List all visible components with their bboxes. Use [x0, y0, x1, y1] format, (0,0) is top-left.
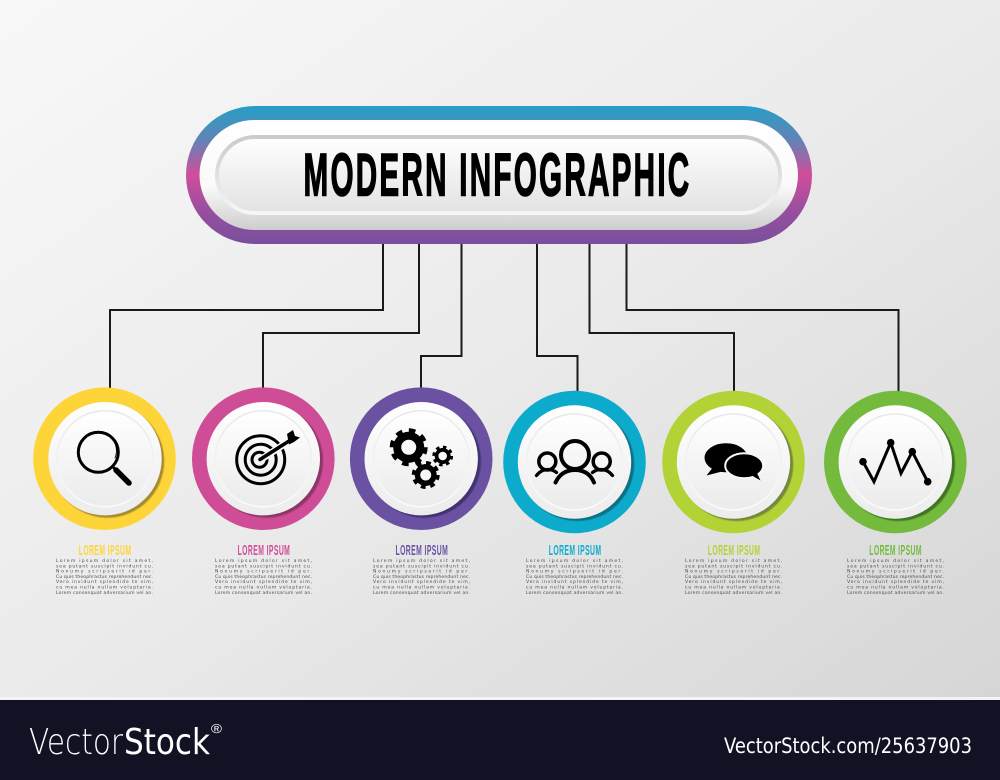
body text: [56, 558, 154, 596]
body text: cu mea nulla nullam voluptaria.: [526, 584, 623, 590]
body text: Vero invidunt splendide te vim,: [215, 579, 313, 585]
body text: Nonumy scripserit id per.: [56, 569, 153, 575]
footer bar: [0, 700, 1000, 780]
footer background: [0, 700, 1000, 780]
disc inner ring: [847, 414, 943, 510]
ring: [350, 387, 493, 530]
footer logo: [29, 721, 222, 763]
body text: Lorem consenquat adversarium vel an.: [685, 590, 782, 596]
body text: Vero invidunt splendide te vim,: [526, 579, 624, 585]
ring: [824, 391, 967, 533]
body text: sea putant suscipit invidunt cu.: [685, 563, 782, 569]
body text: [215, 558, 313, 596]
body text: Lorem ipsum dolor sit amet,: [847, 558, 945, 564]
disc inner ring: [57, 411, 153, 507]
disc shadow: [51, 404, 164, 518]
panel: line chart: [824, 391, 967, 596]
body text: Nonumy scripserit id per.: [526, 569, 623, 575]
body text: Lorem ipsum dolor sit amet,: [56, 558, 154, 564]
body text: Lorem ipsum dolor sit amet,: [373, 558, 471, 564]
disc: [207, 402, 320, 515]
body text: Lorem consenquat adversarium vel an.: [373, 590, 470, 596]
title pill: [186, 106, 812, 244]
panel: team: [503, 391, 646, 596]
body text: Nonumy scripserit id per.: [847, 569, 944, 575]
disc inner ring: [526, 414, 622, 510]
heading: LOREM IPSUM: [549, 543, 601, 559]
icon: target: [237, 430, 300, 484]
body text: Vero invidunt splendide te vim,: [56, 579, 154, 585]
icon: gears: [392, 431, 452, 487]
heading: LOREM IPSUM: [238, 543, 290, 559]
disc shadow: [368, 404, 481, 518]
body text: sea putant suscipit invidunt cu.: [526, 563, 623, 569]
body text: [847, 558, 945, 596]
pill white body: [200, 120, 798, 230]
body text: [685, 558, 783, 596]
body text: Nonumy scripserit id per.: [685, 569, 782, 575]
pill gradient rim: [186, 106, 812, 244]
disc: [518, 405, 631, 519]
footer logo: ®: [211, 721, 222, 736]
body text: Lorem consenquat adversarium vel an.: [526, 590, 623, 596]
ring: [662, 391, 805, 533]
ring: [192, 387, 335, 530]
title: MODERN INFOGRAPHIC: [304, 142, 691, 209]
connector lines: [110, 243, 898, 392]
body text: Nonumy scripserit id per.: [215, 569, 312, 575]
body text: cu mea nulla nullam voluptaria.: [847, 584, 944, 590]
body text: Cu quis theophrastus reprehendunt nec.: [56, 574, 153, 580]
body text: cu mea nulla nullam voluptaria.: [56, 584, 153, 590]
body text: Cu quis theophrastus reprehendunt nec.: [685, 574, 782, 580]
heading: LOREM IPSUM: [708, 543, 760, 559]
white strip: [0, 697, 1000, 700]
body text: [373, 558, 471, 596]
disc: [48, 402, 162, 515]
body text: Lorem consenquat adversarium vel an.: [847, 590, 944, 596]
disc inner ring: [215, 411, 311, 507]
ring: [503, 391, 646, 533]
body text: Lorem consenquat adversarium vel an.: [56, 590, 153, 596]
disc inner ring: [686, 414, 782, 510]
body text: sea putant suscipit invidunt cu.: [373, 563, 470, 569]
disc shadow: [521, 408, 634, 521]
body text: Lorem ipsum dolor sit amet,: [526, 558, 624, 564]
disc: [677, 405, 790, 519]
icon: magnifier: [78, 432, 129, 483]
body text: Vero invidunt splendide te vim,: [847, 579, 945, 585]
disc inner ring: [373, 411, 469, 507]
heading: LOREM IPSUM: [79, 543, 131, 559]
panel: target: [192, 387, 335, 596]
panel: chat: [662, 391, 805, 596]
body text: Lorem ipsum dolor sit amet,: [685, 558, 783, 564]
disc shadow: [210, 404, 323, 518]
disc: [839, 405, 952, 519]
heading: LOREM IPSUM: [869, 543, 922, 559]
body text: Lorem ipsum dolor sit amet,: [215, 558, 313, 564]
body text: sea putant suscipit invidunt cu.: [847, 563, 944, 569]
body text: Cu quis theophrastus reprehendunt nec.: [526, 574, 623, 580]
footer logo: Stock: [124, 722, 210, 763]
body text: Cu quis theophrastus reprehendunt nec.: [373, 574, 470, 580]
body text: [526, 558, 624, 596]
disc shadow: [842, 408, 955, 521]
heading: LOREM IPSUM: [396, 543, 448, 559]
ring: [33, 387, 176, 530]
icon: people: [536, 441, 612, 482]
panel: search: [33, 387, 176, 596]
body text: cu mea nulla nullam voluptaria.: [215, 584, 312, 590]
disc shadow: [680, 408, 793, 521]
footer logo: Vector: [29, 722, 123, 763]
body text: Lorem consenquat adversarium vel an.: [215, 590, 312, 596]
body text: Cu quis theophrastus reprehendunt nec.: [215, 574, 312, 580]
icon: speech bubbles: [704, 443, 763, 480]
body text: Cu quis theophrastus reprehendunt nec.: [847, 574, 944, 580]
body text: Nonumy scripserit id per.: [373, 569, 470, 575]
body text: cu mea nulla nullam voluptaria.: [373, 584, 470, 590]
body text: cu mea nulla nullam voluptaria.: [685, 584, 782, 590]
icon: zigzag chart: [859, 439, 932, 486]
body text: Vero invidunt splendide te vim,: [373, 579, 471, 585]
body text: sea putant suscipit invidunt cu.: [215, 563, 312, 569]
panel: gears: [350, 387, 493, 596]
disc: [364, 402, 478, 515]
pill inner ring: [217, 137, 780, 213]
body text: Vero invidunt splendide te vim,: [685, 579, 783, 585]
body text: sea putant suscipit invidunt cu.: [56, 563, 153, 569]
